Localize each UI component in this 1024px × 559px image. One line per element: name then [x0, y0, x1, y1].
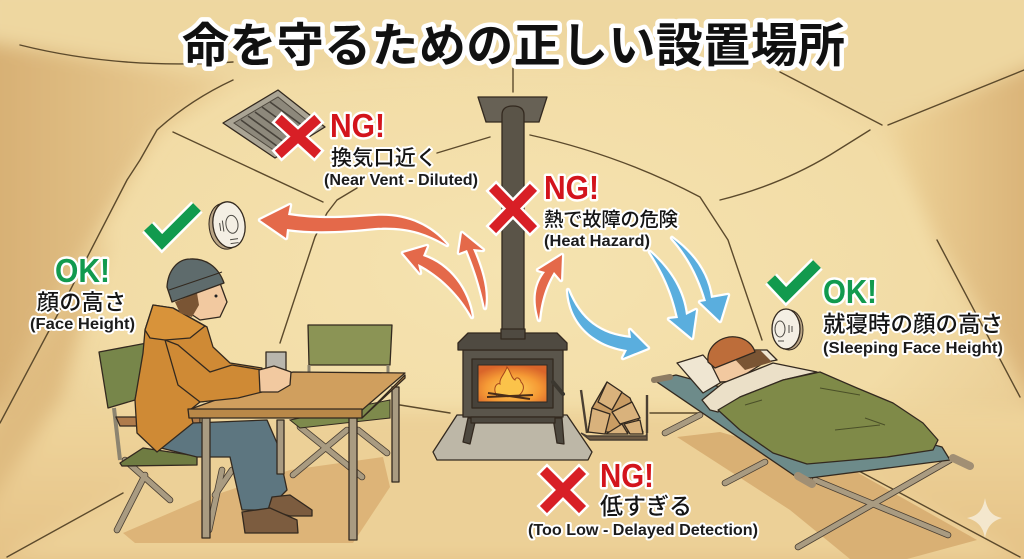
NG callout: too low — [528, 457, 758, 539]
cot poles — [654, 377, 670, 380]
NG callout: near vent — [282, 107, 478, 189]
NG callout: too low: (Too Low - Delayed Detection) — [528, 522, 758, 539]
arrow: blue right — [672, 238, 728, 321]
orange jacket — [135, 305, 262, 452]
NG callout: pipe heat — [496, 169, 678, 250]
sleeping bag — [718, 372, 938, 464]
jacket sleeve over table — [165, 340, 262, 402]
ceiling plate — [478, 97, 547, 122]
icon: red X floor — [547, 474, 579, 506]
sleeper beanie — [708, 337, 755, 368]
arrow: red middle — [459, 233, 486, 308]
arrow: blue middle — [650, 252, 696, 338]
cot with sleeping person — [654, 337, 977, 559]
stove body — [463, 350, 563, 417]
arrow: blue low — [568, 290, 648, 358]
icon: green check right — [771, 264, 817, 295]
icon: smoke detector right — [772, 309, 803, 350]
door handle — [553, 382, 563, 394]
blanket liner — [702, 363, 817, 412]
detector and OK callout: face height — [30, 200, 248, 333]
icon: red X vent — [282, 122, 314, 151]
table — [188, 372, 405, 410]
pillow — [677, 355, 725, 393]
cold air arrows — [568, 238, 728, 358]
hands — [259, 366, 291, 392]
title: 命を守るための正しい設置場所 — [182, 19, 845, 72]
heat arrows — [260, 205, 562, 320]
flames — [495, 367, 523, 396]
NG callout: near vent: NG! — [330, 107, 385, 144]
back camp chair — [290, 325, 392, 477]
cot legs — [665, 415, 950, 547]
icon: green check left — [148, 207, 197, 242]
detector and OK callout: sleeping height — [771, 264, 1003, 357]
NG callout: too low: NG! — [600, 457, 654, 494]
cot fabric — [654, 375, 950, 478]
front chair legs — [117, 460, 232, 530]
NG callout: pipe heat: 熱で故障の危険 — [544, 209, 678, 231]
NG callout: too low: 低すぎる — [600, 493, 692, 519]
detector and OK callout: face height: (Face Height) — [30, 316, 135, 333]
icon: red X pipe — [496, 191, 530, 226]
front chair armrest — [114, 408, 120, 460]
face — [188, 283, 227, 320]
table legs — [202, 418, 210, 538]
beanie hat — [167, 259, 224, 302]
pants — [157, 420, 287, 510]
NG callout: near vent: (Near Vent - Diluted) — [324, 172, 478, 189]
arrow: red left — [403, 246, 472, 317]
arrow: long red to detector — [260, 205, 447, 245]
hood fold — [145, 305, 205, 340]
stove pipe — [502, 106, 524, 330]
stove hearth pad — [433, 415, 592, 460]
chair seat — [120, 448, 197, 466]
stove legs — [463, 418, 564, 444]
sleeping face — [712, 352, 765, 382]
boots — [268, 495, 312, 516]
NG callout: near vent: 換気口近く — [331, 147, 437, 170]
detector and OK callout: sleeping height: 就寝時の顔の高さ — [823, 312, 1003, 337]
icon: ceiling vent — [223, 90, 325, 158]
fire window — [478, 365, 547, 402]
front camp chair back — [99, 343, 147, 408]
detector and OK callout: face height: 顔の高さ — [37, 290, 126, 315]
mug — [266, 352, 286, 372]
sparkle watermark — [967, 498, 1002, 538]
firewood rack — [581, 382, 647, 440]
floor shadow — [123, 457, 390, 543]
hair — [175, 293, 199, 317]
arrow: red right — [536, 255, 562, 320]
detector and OK callout: sleeping height: OK! — [823, 273, 877, 310]
wood stove — [433, 97, 592, 460]
NG callout: pipe heat: NG! — [544, 169, 599, 206]
icon: smoke detector left — [206, 200, 248, 251]
detector and OK callout: sleeping height: (Sleeping Face Height) — [823, 340, 1003, 357]
detector and OK callout: face height: OK! — [55, 252, 110, 289]
NG callout: pipe heat: (Heat Hazard) — [544, 233, 650, 250]
seated man at table scene — [99, 259, 405, 543]
cot floor shadow — [677, 432, 977, 559]
